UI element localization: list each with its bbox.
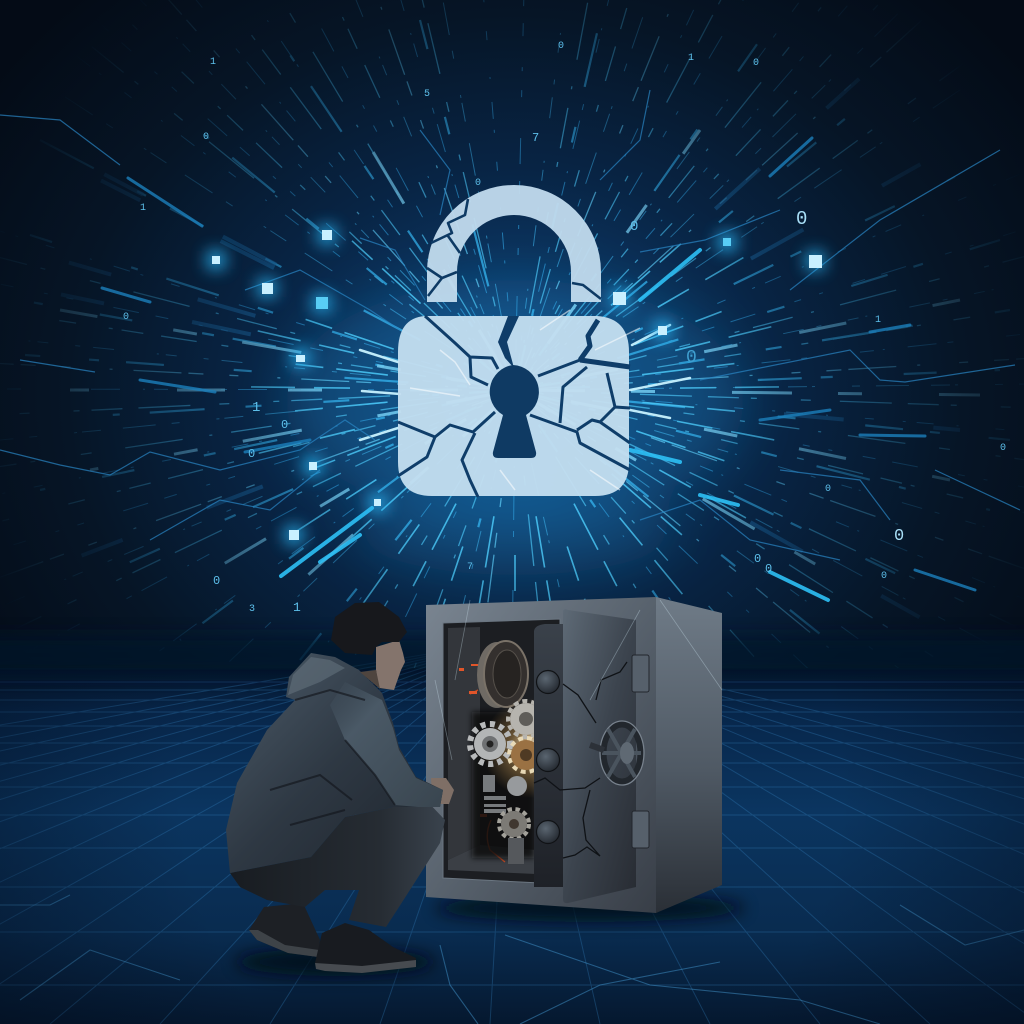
scattered binary digits: 0 [203,132,209,143]
scattered binary digits: 0 [123,312,129,323]
scattered binary digits: 0 [281,418,288,432]
wires and sparks [470,690,505,862]
gear cluster shadow [472,712,534,858]
scattered binary digits: 0 [630,219,638,235]
shackle cracks [427,199,601,299]
pants [230,800,445,927]
safe front frame [426,597,656,913]
padlock body [398,316,629,496]
locking bolts [536,670,560,844]
open safe [426,597,722,913]
steel roller [507,776,527,796]
safe scratches [435,600,722,760]
central glow behind lock [285,280,745,575]
jacket with hood [226,653,443,873]
scattered binary digits: 0 [894,527,904,546]
scattered binary digits: 0 [558,41,564,52]
silver gear [470,724,510,764]
scattered binary digits: 0 [213,574,220,588]
scattered binary digits: 0 [765,562,772,576]
lock glints [410,310,640,490]
upper gear [508,701,544,737]
circuit traces [0,90,1020,560]
circuit modules [483,775,506,813]
cracked padlock icon [398,185,640,497]
safe mechanism [459,641,582,864]
scattered binary digits: 0 [825,484,831,495]
face [376,640,405,690]
large drum gear [477,642,517,708]
scattered binary digits: 1 [210,57,216,68]
keyhole [490,365,539,458]
hood highlight [288,657,345,695]
data burst rays [0,0,1024,680]
hair [331,602,407,655]
scattered binary digits: 0 [1000,443,1006,454]
scattered binary digits: 7 [467,562,473,573]
safe side panel [656,597,722,913]
scattered binary digits: 0 [753,58,759,69]
scattered binary digits: 1 [765,669,771,680]
floor circuit traces [0,895,1024,1024]
neck shadow [360,670,380,689]
bronze gear [509,738,543,772]
scattered binary digits: 1 [140,203,146,214]
scattered binary digits: 5 [424,89,430,100]
scattered binary digits: 0 [686,348,697,368]
scattered binary digits: 1 [293,600,301,615]
bright streak accents [102,138,975,600]
scattered binary digits: 7 [532,131,539,145]
safe opening interior [443,619,560,884]
scattered binary digits: 0 [881,571,887,582]
scattered binary digits: 0 [796,208,807,230]
door face [563,609,636,903]
scattered binary digits: 0 [248,447,255,461]
background: dark blue radial sky [0,0,1024,680]
scattered binary digits: 1 [252,400,260,416]
hand [431,778,454,804]
interior glow [482,698,582,798]
body cracks [398,316,630,497]
door inner edge [534,624,563,887]
back shoe [249,903,320,957]
front shoe [315,923,416,972]
horizon haze [0,635,1024,675]
crouching person [226,602,454,973]
scattered binary digits: 1 [688,53,694,64]
scattered binary digits: 1 [875,315,881,326]
lower gear [499,809,529,839]
safe wheel [590,721,644,785]
floor [0,635,1024,1024]
glowing data squares [207,226,824,544]
scattered binary digits: 0 [754,552,761,566]
ground shadows [235,894,745,976]
floor grid [0,640,1024,1024]
door cracks [534,662,627,858]
jacket folds [270,690,395,825]
scattered binary digits: 3 [249,604,255,615]
padlock shackle [427,185,601,302]
hinges [632,655,649,848]
scattered binary digits: 0 [475,178,481,189]
floor vignette [0,668,1024,1024]
scattered binary digits [123,41,1006,680]
jacket sleeve [330,682,443,807]
